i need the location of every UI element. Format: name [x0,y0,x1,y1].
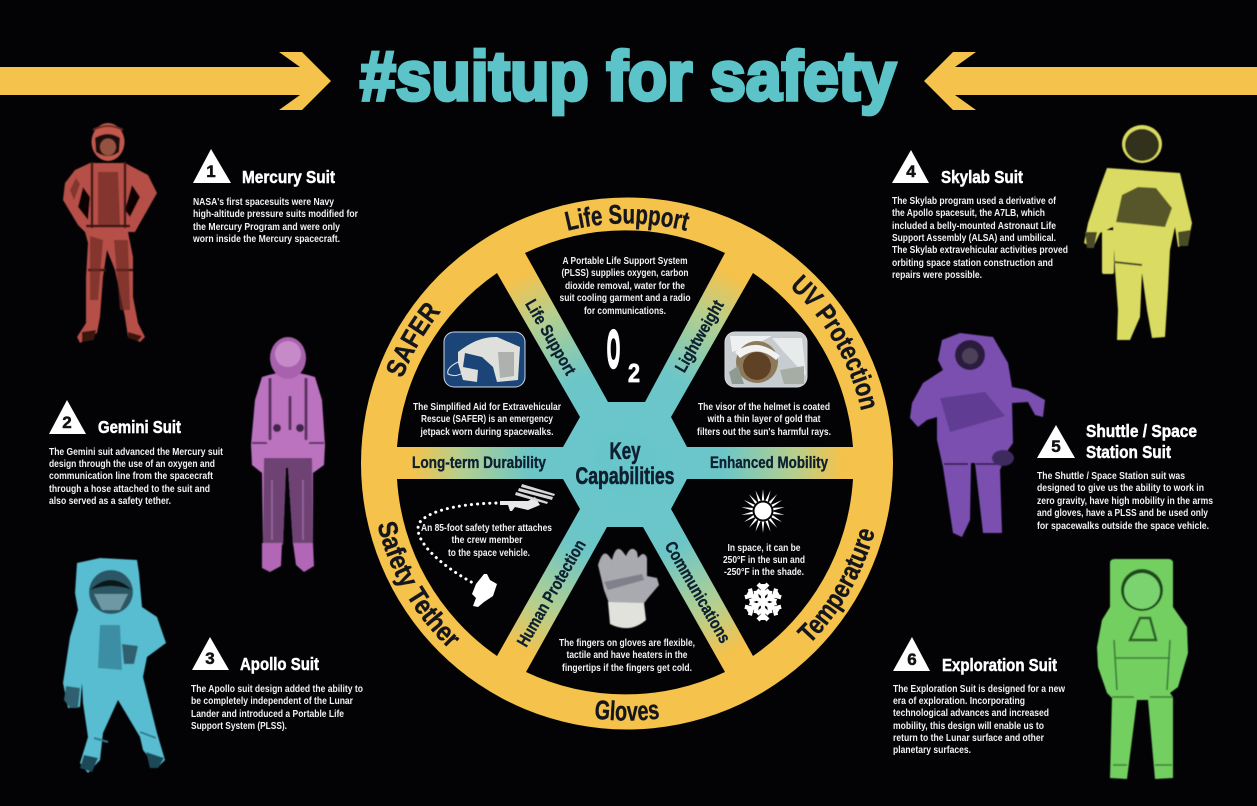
text block: Skylab Suit: the Apollo spacesuit, the A7LB, which [892,207,1045,219]
text block: Gemini Suit: communication line from the spacecraft [49,470,213,482]
ring label: Temperature: Temperature [796,529,874,641]
wedge text: safety tether: An 85-foot safety tether attaches [421,522,552,534]
left header arrow [0,52,331,110]
heading: Skylab Suit: Skylab Suit [941,167,1023,187]
text block: Apollo Suit [191,683,363,732]
wheel hub and spokes [395,232,859,696]
heading: Shuttle / Space Station Suit: Station Suit [1086,442,1171,462]
text block: Skylab Suit: repairs were possible. [892,269,982,281]
icon: glove [598,549,659,628]
wedge text: gloves [559,637,695,674]
wedge text: SAFER [413,401,561,438]
text block: Mercury Suit: high-altitude pressure suits modified for [193,208,358,220]
wedge: temperature [671,479,853,656]
wedge text: life support [560,255,690,317]
text block: Apollo Suit: be completely independent of the Lunar [191,695,353,707]
image: SAFER jetpack [444,332,525,387]
text block: Skylab Suit: The Skylab program used a derivative of [892,195,1056,207]
text block: Exploration Suit: return to the Lunar surface and other [893,732,1044,744]
text block: Exploration Suit [893,683,1066,756]
suit: Exploration (green) [1097,559,1188,779]
heading: Skylab Suit [892,150,1023,187]
wedge text: safety tether: the crew member [452,534,522,546]
wedge text: SAFER: Rescue (SAFER) is an emergency [421,413,553,425]
icon: O2: O [607,321,620,379]
text block: Mercury Suit: NASA's first spacesuits were Navy [193,196,334,208]
ring label: Gloves: Gloves [596,700,659,721]
heading: Mercury Suit [193,149,335,187]
icon: space station [500,484,555,511]
text block: Gemini Suit: The Gemini suit advanced the Mercury suit [49,446,223,458]
text block: Apollo Suit: The Apollo suit design added the ability to [191,683,363,695]
heading: Gemini Suit: Gemini Suit [98,417,181,437]
text block: Apollo Suit: Lander and introduced a Portable Life [191,708,344,720]
ring label: Life Support: Life Support [564,204,690,231]
wedge text: SAFER: jetpack worn during spacewalks. [420,426,554,438]
suit: Skylab (yellow) [1084,125,1192,340]
icon: number triangle 5 [1037,425,1075,458]
text block: Exploration Suit: mobility, this design will enable us to [893,720,1044,732]
ring label: SAFER: SAFER [386,302,442,376]
icon: O2: 2 [628,358,640,388]
wedge text: UV protection: The visor of the helmet is coated [698,401,830,413]
wedge: life support [525,230,725,402]
wedge: safety tether [397,479,580,656]
wedge text: temperature: 250°F in the sun and [723,554,805,566]
text block: Skylab Suit: included a belly-mounted Astronaut Life [892,220,1056,232]
wedge text: UV protection [697,401,831,438]
icon: number triangle 6: 6 [907,650,917,669]
ring label: Safety Tether: Safety Tether [378,522,460,646]
text block: Mercury Suit: the Mercury Program and were only [193,221,340,233]
text block: Skylab Suit: The Skylab extravehicular activities proved [892,244,1068,256]
icon: number triangle 5: 5 [1051,437,1061,456]
spoke label: Life Support: Life Support [521,296,580,379]
wedge text: life support: dioxide removal, water for the [565,280,685,292]
text block: Mercury Suit [192,196,358,245]
text block: Exploration Suit: The Exploration Suit is designed for a new [893,683,1066,695]
text block: Skylab Suit: orbiting space station construction and [892,257,1053,269]
spoke label: Long-term Durability: Long-term Durability [412,453,546,472]
text block: Exploration Suit: era of exploration. Incorporating [893,695,1025,707]
wedge text: gloves: fingertips if the fingers get cold. [562,662,692,674]
text block: Apollo Suit: Support System (PLSS). [191,720,287,732]
heading: Shuttle / Space Station Suit: Shuttle / Space [1086,421,1197,441]
wedge text: temperature: -250°F in the shade. [724,566,804,578]
wedge text: temperature [723,542,805,578]
title: #suitup for safety [360,37,896,115]
text block: Shuttle / Space Station Suit: designed to give us the ability to work in [1037,482,1204,494]
panel: key capabilities wheel [361,198,893,730]
wedge: gloves [526,527,725,694]
icon: sun [741,489,785,533]
heading: Apollo Suit [192,637,319,674]
heading: Shuttle / Space Station Suit [1037,421,1197,462]
text block: Mercury Suit: worn inside the Mercury spacecraft. [192,233,340,245]
hub label: Capabilities [576,463,674,490]
text block: Shuttle / Space Station Suit: The Shuttle / Space Station suit was [1037,470,1185,482]
suit: Shuttle (purple) [910,333,1045,537]
wedge: SAFER [397,273,580,447]
wedge text: life support: (PLSS) supplies oxygen, carbon [562,267,688,279]
wedge text: SAFER: The Simplified Aid for Extravehicular [413,401,561,413]
text block: Exploration Suit: technological advances and increased [893,707,1049,719]
hub label [576,438,674,490]
suit: Apollo (cyan) [63,558,166,773]
wedge: UV protection [671,273,853,447]
spoke label: Communications: Communications [661,538,734,646]
text block: Shuttle / Space Station Suit: zero gravity, have high mobility in the arms [1037,495,1213,507]
wedge text: life support: suit cooling garment and a radio [560,292,690,304]
spoke label: Lightweight: Lightweight [671,297,728,376]
heading: Apollo Suit: Apollo Suit [240,654,319,674]
text block: Shuttle / Space Station Suit: and gloves, have a PLSS and be used only [1037,507,1208,519]
text block: Gemini Suit: also served as a safety tether. [49,495,171,507]
wedge text: life support: A Portable Life Support System [562,255,688,267]
text block: Skylab Suit: Support Assembly (ALSA) and umbilical. [892,232,1056,244]
icon: tethered astronaut [472,574,497,607]
heading: Gemini Suit [49,400,181,437]
text block: Gemini Suit [49,446,223,507]
suit: Gemini (pink) [251,337,325,572]
wedge text: UV protection: with a thin layer of gold that [707,413,821,425]
hub label: Key [610,438,641,465]
wedge text: UV protection: filters out the sun's harmful rays. [697,426,831,438]
text block: Gemini Suit: through a hose attached to the suit and [49,483,210,495]
icon: tether dotted line [418,503,502,583]
text block: Exploration Suit: planetary surfaces. [893,744,971,756]
text block: Gemini Suit: design through the use of an oxygen and [49,458,215,470]
heading: Exploration Suit [893,637,1057,675]
icon: number triangle 4: 4 [906,162,916,181]
text block: Shuttle / Space Station Suit [1037,470,1213,532]
wheel outer ring [361,198,893,730]
text block: Shuttle / Space Station Suit: for spacewalks outside the space vehicle. [1037,520,1209,532]
wedge text: gloves: The fingers on gloves are flexible, [559,637,695,649]
icon: number triangle 1 [193,149,231,183]
icon: number triangle 2: 2 [62,413,72,432]
right header arrow [924,52,1257,110]
wedge text: gloves: tactile and have heaters in the [566,649,688,661]
icon: snowflake [744,584,782,620]
wedge text: temperature: In space, it can be [728,542,801,554]
suit: Mercury (red) [63,123,157,343]
icon: number triangle 6 [893,637,930,671]
text block: Skylab Suit [892,195,1068,281]
heading: Mercury Suit: Mercury Suit [242,167,335,187]
spoke label: Human Protection: Human Protection [513,537,590,650]
wedge text: safety tether [421,522,552,559]
wedge text: life support: for communications. [584,305,666,317]
icon: number triangle 3: 3 [205,649,215,668]
image: helmet visor [725,332,807,387]
icon: number triangle 1: 1 [206,162,216,181]
spoke label: Enhanced Mobility: Enhanced Mobility [710,453,828,472]
ring label: UV Protection: UV Protection [792,274,875,410]
heading: Exploration Suit: Exploration Suit [942,655,1057,675]
wedge text: safety tether: to the space vehicle. [448,547,530,559]
